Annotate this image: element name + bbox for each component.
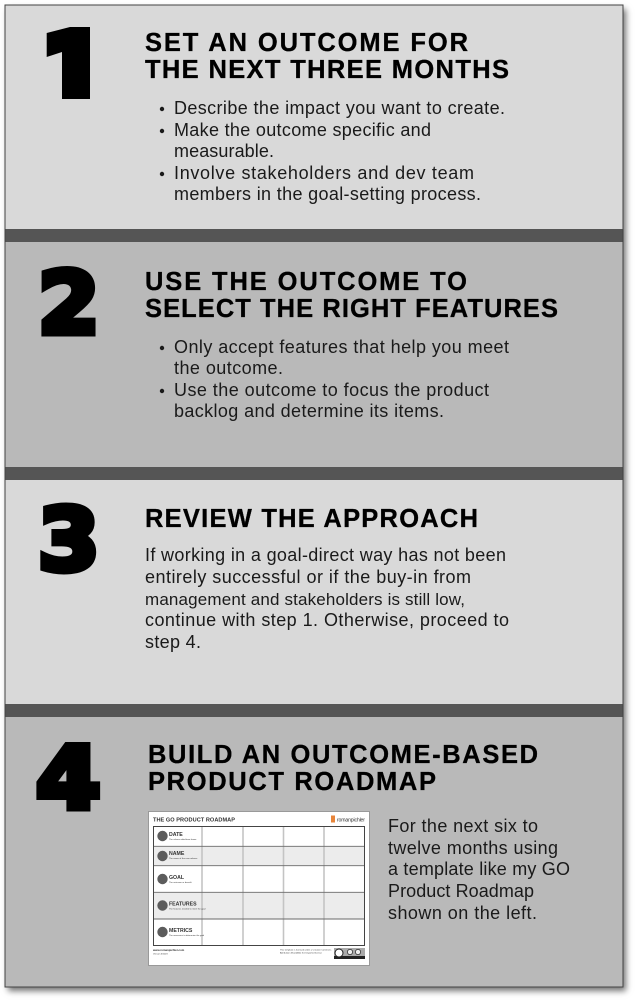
- roadmap template thumbnail: [148, 812, 370, 966]
- row: features: The features needed to meet the goal: [169, 908, 206, 910]
- bullet list: step 1: Involve stakeholders and dev team: [174, 163, 474, 183]
- heading: step 1: THE NEXT THREE MONTHS: [145, 56, 509, 84]
- row: name: NAME: [169, 851, 185, 857]
- panel: step 2: [5, 242, 623, 467]
- heading: step 1: [145, 29, 509, 84]
- thumbnail logo: [331, 816, 365, 824]
- row: metrics: METRICS: [169, 928, 193, 934]
- divider bar: [5, 467, 623, 480]
- bullet list: step 1: [160, 98, 505, 204]
- bullet list: step 2: Use the outcome to focus the product: [174, 380, 489, 400]
- heading: step 2: USE THE OUTCOME TO: [145, 268, 467, 296]
- panel: step 1: [5, 5, 623, 229]
- heading: step 2: [145, 268, 558, 323]
- bullet list: step 1: measurable.: [174, 141, 274, 161]
- heading: step 4: BUILD AN OUTCOME-BASED: [148, 741, 538, 769]
- thumbnail footer: www.romanpichler.com: [152, 948, 185, 952]
- row: date: The release date/time frame: [169, 838, 197, 841]
- paragraph: step 4: twelve months using: [388, 838, 558, 858]
- bullet list: step 2: backlog and determine its items.: [174, 401, 444, 421]
- row: date: DATE: [169, 832, 183, 838]
- bullet list: step 1: members in the goal-setting process.: [174, 184, 481, 204]
- row: features: [157, 900, 206, 911]
- heading: step 2: SELECT THE RIGHT FEATURES: [145, 295, 558, 323]
- paragraph: step 3: If working in a goal-direct way has not been: [145, 545, 506, 565]
- column lines: [202, 826, 324, 946]
- heading: step 4: PRODUCT ROADMAP: [148, 768, 436, 796]
- thumbnail footer: Attribution-ShareAlike 3.0 Unported license: [280, 952, 323, 954]
- paragraph: step 3: [145, 545, 509, 652]
- thumbnail footer: This template is licensed under a Creative Commons: [280, 948, 332, 952]
- thumbnail footer: [152, 948, 332, 956]
- number 4: 4: [36, 729, 101, 829]
- bullet list: step 2: the outcome.: [174, 358, 283, 378]
- number 2: 2: [38, 253, 100, 354]
- row: metrics: [157, 927, 205, 937]
- heading: step 3: REVIEW THE APPROACH: [145, 505, 478, 533]
- shaded rows: [154, 846, 364, 866]
- paragraph: step 4: [388, 816, 570, 923]
- paragraph: step 3: management and stakeholders is still low,: [145, 590, 465, 609]
- licence badge: [334, 948, 365, 959]
- number 3: 3: [38, 490, 100, 591]
- paragraph: step 4: shown on the left.: [388, 903, 537, 923]
- paragraph: step 4: Product Roadmap: [388, 881, 534, 901]
- paragraph: step 4: For the next six to: [388, 816, 538, 836]
- bullet list: step 2: [160, 337, 509, 421]
- bullet list: step 1: Make the outcome specific and: [174, 120, 431, 140]
- thumbnail footer: Version 3/2023: [153, 952, 168, 956]
- heading: step 1: SET AN OUTCOME FOR: [145, 29, 468, 57]
- panel: step 4: [5, 717, 623, 987]
- divider bar: [5, 704, 623, 717]
- row: name: [157, 851, 198, 861]
- row: name: The name of the new release: [169, 857, 198, 860]
- panel: step 3: [5, 480, 623, 704]
- row: goal: GOAL: [169, 875, 185, 881]
- thumbnail logo: romanpichler: [337, 818, 365, 824]
- bullet list: step 1: Describe the impact you want to create.: [174, 98, 505, 118]
- thumbnail title: THE GO PRODUCT ROADMAP: [153, 818, 235, 824]
- divider bar: [5, 229, 623, 242]
- table frame: [154, 826, 364, 946]
- row: goal: The outcome or benefit: [169, 881, 192, 884]
- row: goal: [157, 874, 192, 884]
- row: date: [157, 831, 197, 841]
- heading: step 4: [148, 741, 538, 796]
- row lines: [153, 846, 365, 919]
- paragraph: step 3: step 4.: [145, 632, 201, 652]
- row: metrics: The measures to determine the goal: [169, 934, 205, 937]
- bullet list: step 2: Only accept features that help you meet: [174, 337, 509, 357]
- paragraph: step 3: continue with step 1. Otherwise, proceed to: [145, 610, 509, 630]
- paragraph: step 4: a template like my GO: [388, 859, 570, 879]
- paragraph: step 3: entirely successful or if the buy-in from: [145, 567, 471, 587]
- number 1: 1: [39, 15, 105, 120]
- row: features: FEATURES: [169, 902, 197, 908]
